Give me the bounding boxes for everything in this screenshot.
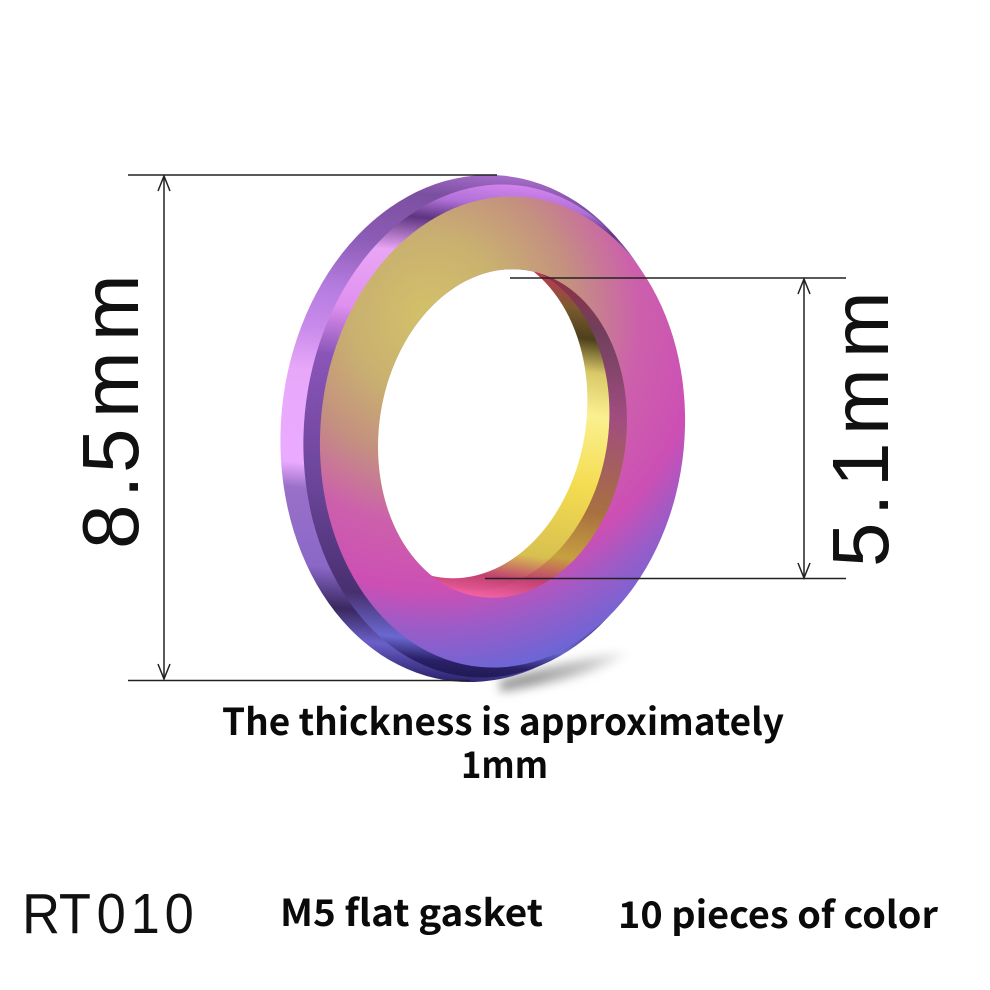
thickness note — [222, 692, 784, 789]
washer inner wall, outer step — [357, 253, 648, 614]
thickness note: 1mm — [461, 735, 548, 789]
washer front face — [299, 180, 706, 684]
washer — [280, 175, 686, 682]
washer shadow — [500, 652, 628, 692]
thickness note: The thickness is approximately — [222, 692, 784, 746]
dimension: inner diameter — [485, 278, 846, 578]
washer inner wall, gold band — [378, 269, 610, 586]
product code: RT010 — [22, 881, 194, 945]
label: 5.1mm: 5.1mm — [816, 291, 905, 567]
washer outer rim — [258, 157, 700, 700]
washer hole — [378, 269, 588, 578]
label: 8.5mm: 8.5mm — [66, 274, 155, 549]
washer stepped rim — [281, 167, 703, 695]
dimension: outer diameter — [128, 175, 497, 680]
product name: M5 flat gasket — [280, 883, 543, 937]
quantity and colour: 10 pieces of color — [618, 885, 939, 939]
